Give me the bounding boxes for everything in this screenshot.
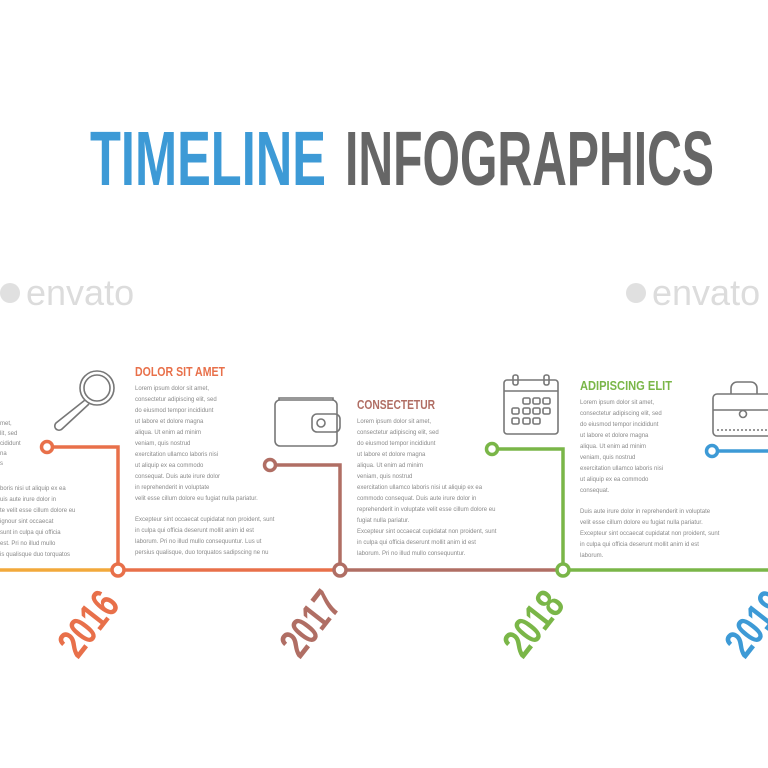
watermark left: envato: [26, 272, 134, 313]
title: TIMELINE: [90, 116, 326, 202]
panel: dolor sit amet: persius qualisque, duo torquatos sadipscing ne nu: [135, 550, 268, 556]
text block: left partial: met,: [0, 421, 12, 427]
panel: dolor sit amet: laborum. Pri no illud mullo consequuntur. Lus ut: [135, 539, 262, 545]
panel: adipiscing elit: Lorem ipsum dolor sit amet,: [580, 400, 654, 406]
panel: adipiscing elit: Duis aute irure dolor in reprehenderit in voluptate: [580, 509, 711, 515]
panel: adipiscing elit: in culpa qui officia deserunt mollit anim id est: [580, 542, 699, 548]
panel: adipiscing elit: veniam, quis nostrud: [580, 455, 635, 461]
branch 2017: [264, 460, 346, 576]
text block: left partial: [0, 421, 75, 558]
branch 2016: [42, 442, 124, 576]
icon: briefcase: [713, 382, 768, 436]
panel: adipiscing elit: [580, 378, 720, 559]
panel: adipiscing elit: aliqua. Ut enim ad minim: [580, 444, 646, 450]
text block: left partial: te velit esse cillum dolore eu: [0, 508, 75, 514]
panel: adipiscing elit: ut labore et dolore magna: [580, 433, 649, 439]
panel: consectetur: consectetur adipiscing elit, sed: [357, 430, 439, 436]
panel: dolor sit amet: veniam, quis nostrud: [135, 441, 190, 447]
panel: dolor sit amet: exercitation ullamco laboris nisi: [135, 452, 218, 458]
year 2016: 2016: [48, 581, 128, 666]
panel: consectetur: CONSECTETUR: [357, 397, 435, 412]
panel: dolor sit amet: velit esse cillum dolore eu fugiat nulla pariatur.: [135, 496, 258, 502]
panel: consectetur: fugiat nulla pariatur.: [357, 518, 410, 524]
text block: left partial: cididunt: [0, 441, 21, 447]
text block: left partial: s: [0, 461, 3, 467]
panel: dolor sit amet: ut aliquip ex ea commodo: [135, 463, 204, 469]
panel: consectetur: veniam, quis nostrud: [357, 474, 412, 480]
title: [90, 116, 714, 202]
branch 2019: [706, 446, 768, 456]
panel: consectetur: do eiusmod tempor incididunt: [357, 441, 436, 447]
panel: dolor sit amet: in culpa qui officia deserunt mollit anim id est: [135, 528, 254, 534]
panel: adipiscing elit: ADIPISCING ELIT: [580, 378, 672, 393]
timeline main line: [0, 568, 768, 572]
panel: consectetur: in culpa qui officia deserunt mollit anim id est: [357, 540, 476, 546]
icon: calendar: [504, 375, 558, 434]
year 2017: 2017: [270, 581, 350, 666]
panel: consectetur: Lorem ipsum dolor sit amet,: [357, 419, 431, 425]
icon: magnifier: [55, 371, 114, 430]
panel: adipiscing elit: ut aliquip ex ea commodo: [580, 477, 649, 483]
text block: left partial: is qualisque duo torquatos: [0, 552, 70, 558]
panel: adipiscing elit: consectetur adipiscing elit, sed: [580, 411, 662, 417]
icon: wallet: [275, 398, 340, 446]
panel: consectetur: exercitation ullamco laboris nisi ut aliquip ex ea: [357, 485, 483, 491]
panel: dolor sit amet: DOLOR SIT AMET: [135, 364, 225, 379]
text block: left partial: na: [0, 451, 7, 457]
text block: left partial: uis aute irure dolor in: [0, 497, 56, 503]
panel: consectetur: aliqua. Ut enim ad minim: [357, 463, 423, 469]
panel: adipiscing elit: Excepteur sint occaecat cupidatat non proident, sunt: [580, 531, 720, 537]
panel: dolor sit amet: [135, 364, 275, 556]
panel: consectetur: commodo consequat. Duis aute irure dolor in: [357, 496, 476, 502]
panel: consectetur: ut labore et dolore magna: [357, 452, 426, 458]
text block: left partial: sunt in culpa qui officia: [0, 530, 61, 536]
panel: consectetur: [357, 397, 497, 557]
panel: dolor sit amet: do eiusmod tempor incididunt: [135, 408, 214, 414]
panel: adipiscing elit: laborum.: [580, 553, 604, 559]
panel: dolor sit amet: consequat. Duis aute irure dolor: [135, 474, 220, 480]
branch 2018: [486, 444, 569, 576]
panel: consectetur: Excepteur sint occaecat cupidatat non proident, sunt: [357, 529, 497, 535]
text block: left partial: boris nisi ut aliquip ex ea: [0, 486, 66, 492]
watermark right: envato: [652, 272, 760, 313]
panel: consectetur: laborum. Pri no illud mullo consequuntur.: [357, 551, 466, 557]
panel: adipiscing elit: do eiusmod tempor incididunt: [580, 422, 659, 428]
text block: left partial: lit, sed: [0, 431, 17, 437]
panel: dolor sit amet: in reprehenderit in voluptate: [135, 485, 210, 491]
text block: left partial: est. Pri no illud mullo: [0, 541, 56, 547]
text block: left partial: ignour sint occaecat: [0, 519, 54, 525]
panel: dolor sit amet: aliqua. Ut enim ad minim: [135, 430, 201, 436]
panel: dolor sit amet: ut labore et dolore magna: [135, 419, 204, 425]
year 2018: 2018: [493, 581, 573, 666]
panel: adipiscing elit: exercitation ullamco laboris nisi: [580, 466, 663, 472]
panel: dolor sit amet: consectetur adipiscing elit, sed: [135, 397, 217, 403]
panel: dolor sit amet: Excepteur sint occaecat cupidatat non proident, sunt: [135, 517, 275, 523]
panel: adipiscing elit: velit esse cillum dolore eu fugiat nulla pariatur.: [580, 520, 703, 526]
panel: consectetur: reprehenderit in voluptate velit esse cillum dolore eu: [357, 507, 495, 513]
panel: adipiscing elit: consequat.: [580, 488, 610, 494]
panel: dolor sit amet: Lorem ipsum dolor sit amet,: [135, 386, 209, 392]
